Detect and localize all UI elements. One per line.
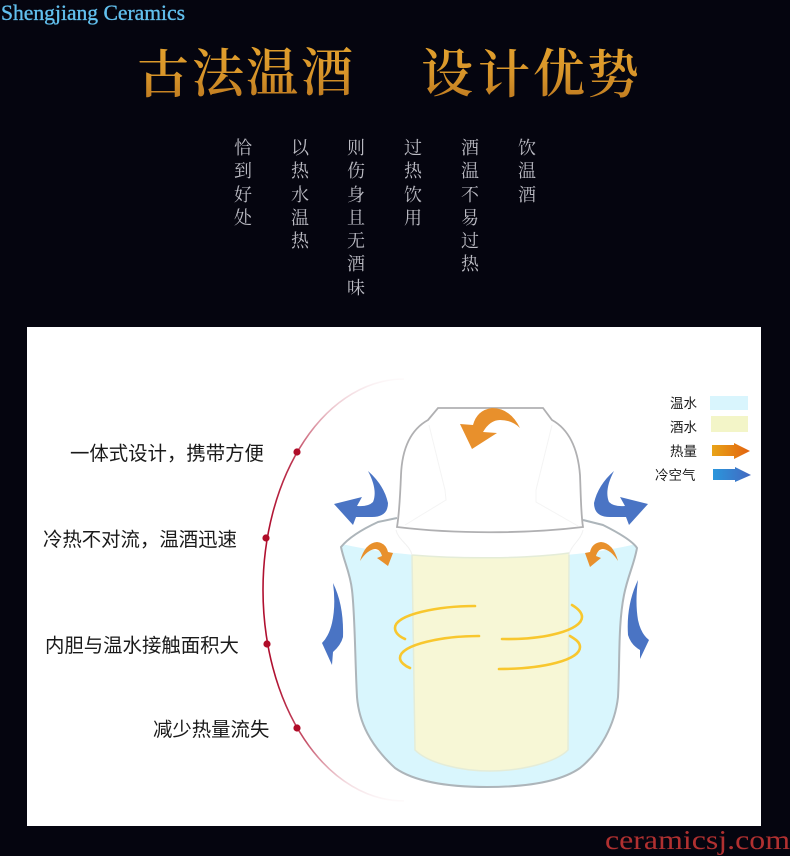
column: 则伤身且无酒味: 伤: [347, 157, 365, 183]
column: 则伤身且无酒味: 味: [347, 274, 365, 300]
column: 饮温酒: 酒: [518, 181, 536, 207]
neck of liner: [396, 530, 583, 555]
jar body with warm water: [341, 516, 637, 787]
arrow: cold air upper left: [334, 471, 388, 525]
watermark: ceramicsj.com: ceramicsj.com: [605, 825, 790, 855]
column: 以热水温热: 热: [291, 227, 310, 253]
title: 古法温酒 设计优势: [137, 31, 639, 108]
title: 古法温酒 设计优势: 酒: [301, 31, 353, 106]
column: 酒温不易过热: 易: [461, 204, 479, 230]
title: 古法温酒 设计优势: 计: [478, 33, 530, 108]
column: 过热饮用: 热: [404, 157, 423, 183]
column: 以热水温热: 水: [291, 181, 309, 207]
title: 古法温酒 设计优势: 温: [246, 31, 298, 106]
cup: [397, 408, 583, 532]
column: 恰到好处: 到: [234, 157, 252, 183]
title: 古法温酒 设计优势: 古: [137, 33, 189, 108]
column: 则伤身且无酒味: 无: [347, 227, 365, 253]
column: 饮温酒: 饮: [518, 134, 536, 160]
column: 则伤身且无酒味: 则: [347, 134, 365, 160]
column: 酒温不易过热: 酒: [461, 134, 479, 160]
legend: wine: 酒水: [670, 420, 698, 435]
arrow: heat top of cup: [460, 408, 520, 449]
column: 酒温不易过热: 过: [461, 227, 479, 253]
legend: heat: 热量: [670, 444, 697, 459]
watermark: Shengjiang Ceramics: Shengjiang Ceramics: [1, 0, 185, 25]
title: 古法温酒 设计优势: 优: [533, 32, 585, 107]
legend: cold air: 冷空气: [655, 468, 696, 483]
title: 古法温酒 设计优势: 势: [587, 33, 639, 108]
column: 酒温不易过热: 温: [461, 157, 479, 183]
column: 恰到好处: 好: [234, 181, 252, 207]
label: 内胆与温水接触面积大: 内胆与温水接触面积大: [45, 635, 239, 657]
arrow: heat inside left: [360, 542, 393, 566]
label: 冷热不对流，温酒迅速: 冷热不对流，温酒迅速: [43, 529, 237, 551]
title: 古法温酒 设计优势: 设: [421, 32, 473, 107]
arrow: cold air upper right: [594, 471, 648, 525]
arrow: cold air lower right: [628, 580, 649, 659]
panel: white diagram area: [27, 327, 761, 826]
feature labels: [43, 443, 269, 741]
arrow: cold air lower left: [322, 583, 343, 665]
column: 恰到好处: 处: [234, 204, 252, 230]
jar outline: [341, 518, 637, 787]
column: 过热饮用: 饮: [404, 181, 422, 207]
column: 则伤身且无酒味: 且: [347, 204, 365, 230]
white shoulder above water: [342, 516, 636, 558]
heating swirls: [395, 605, 582, 669]
column: 饮温酒: 温: [518, 157, 536, 183]
title: 古法温酒 设计优势: 法: [192, 32, 247, 107]
legend: warm water: 温水: [670, 396, 698, 411]
vertical text columns: [234, 134, 536, 300]
column: 以热水温热: 热: [291, 157, 310, 183]
column: 以热水温热: 温: [291, 204, 309, 230]
column: 以热水温热: 以: [291, 134, 310, 160]
column: 恰到好处: 恰: [234, 134, 252, 160]
red arc with dots: [262, 379, 404, 801]
column: 则伤身且无酒味: 身: [347, 181, 365, 207]
legend: [655, 396, 751, 483]
column: 酒温不易过热: 不: [461, 181, 479, 207]
column: 酒温不易过热: 热: [461, 250, 480, 276]
arrow: heat inside right: [585, 542, 618, 567]
inner liner with wine: [412, 553, 569, 771]
label: 减少热量流失: 减少热量流失: [153, 719, 269, 741]
column: 则伤身且无酒味: 酒: [347, 250, 365, 276]
column: 过热饮用: 用: [404, 204, 422, 230]
label: 一体式设计，携带方便: 一体式设计，携带方便: [70, 443, 264, 465]
column: 过热饮用: 过: [404, 134, 422, 160]
